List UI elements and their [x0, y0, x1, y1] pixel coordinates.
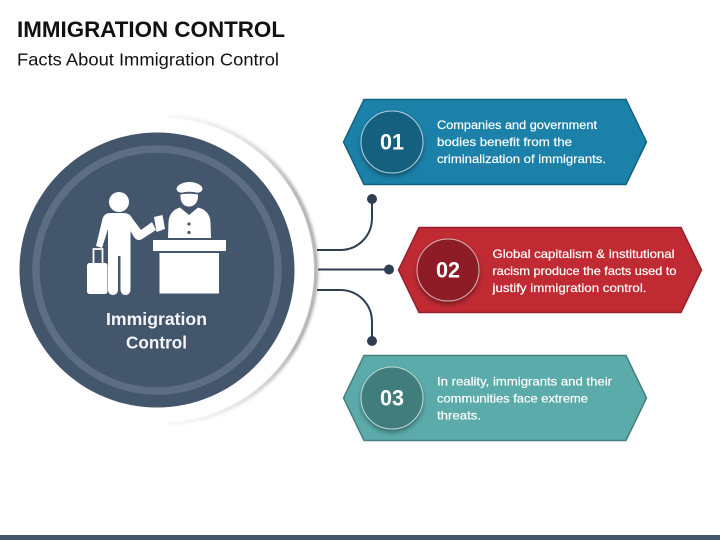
passport — [154, 215, 165, 232]
officer — [168, 182, 211, 238]
text 03: threats. — [437, 408, 481, 422]
suitcase — [87, 249, 108, 294]
connector lines — [317, 194, 394, 346]
panel: item 01 — [344, 100, 646, 184]
text 01: bodies benefit from the — [437, 135, 572, 149]
text 02: racism produce the facts used to — [492, 264, 677, 278]
number badge 02 — [417, 239, 479, 301]
connector: item 01 — [317, 194, 377, 250]
text 03 — [437, 374, 612, 422]
title: IMMIGRATION CONTROL — [17, 17, 285, 42]
text 02 — [491, 247, 677, 295]
text 01: Companies and government — [437, 118, 598, 132]
number badge 03 — [361, 367, 423, 429]
circle label: Control — [126, 332, 187, 352]
footer bar — [0, 535, 720, 540]
subtitle: Facts About Immigration Control — [17, 50, 279, 70]
number badge 03: 03 — [380, 386, 404, 410]
panel: item 02 — [398, 228, 702, 312]
panel: item 03 — [344, 356, 646, 440]
text 03: communities face extreme — [437, 392, 588, 406]
connector: item 03 — [317, 290, 377, 346]
number badge 01 — [361, 111, 423, 173]
crescent shadow behind main circle — [157, 117, 316, 423]
text 03: In reality, immigrants and their — [437, 374, 612, 388]
icon: traveller and immigration officer — [87, 182, 226, 295]
number badge 02: 02 — [436, 258, 460, 282]
circle label: Immigration — [106, 309, 207, 329]
text 02: justify immigration control. — [491, 281, 646, 295]
main circle — [20, 132, 294, 408]
connector: item 02 — [318, 264, 394, 274]
traveller — [96, 192, 165, 295]
text 01: criminalization of immigrants. — [437, 152, 606, 166]
desk — [153, 240, 226, 294]
text 01 — [437, 118, 606, 166]
circle label — [106, 309, 207, 352]
number badge 01: 01 — [380, 130, 404, 154]
text 02: Global capitalism & institutional — [492, 247, 674, 261]
